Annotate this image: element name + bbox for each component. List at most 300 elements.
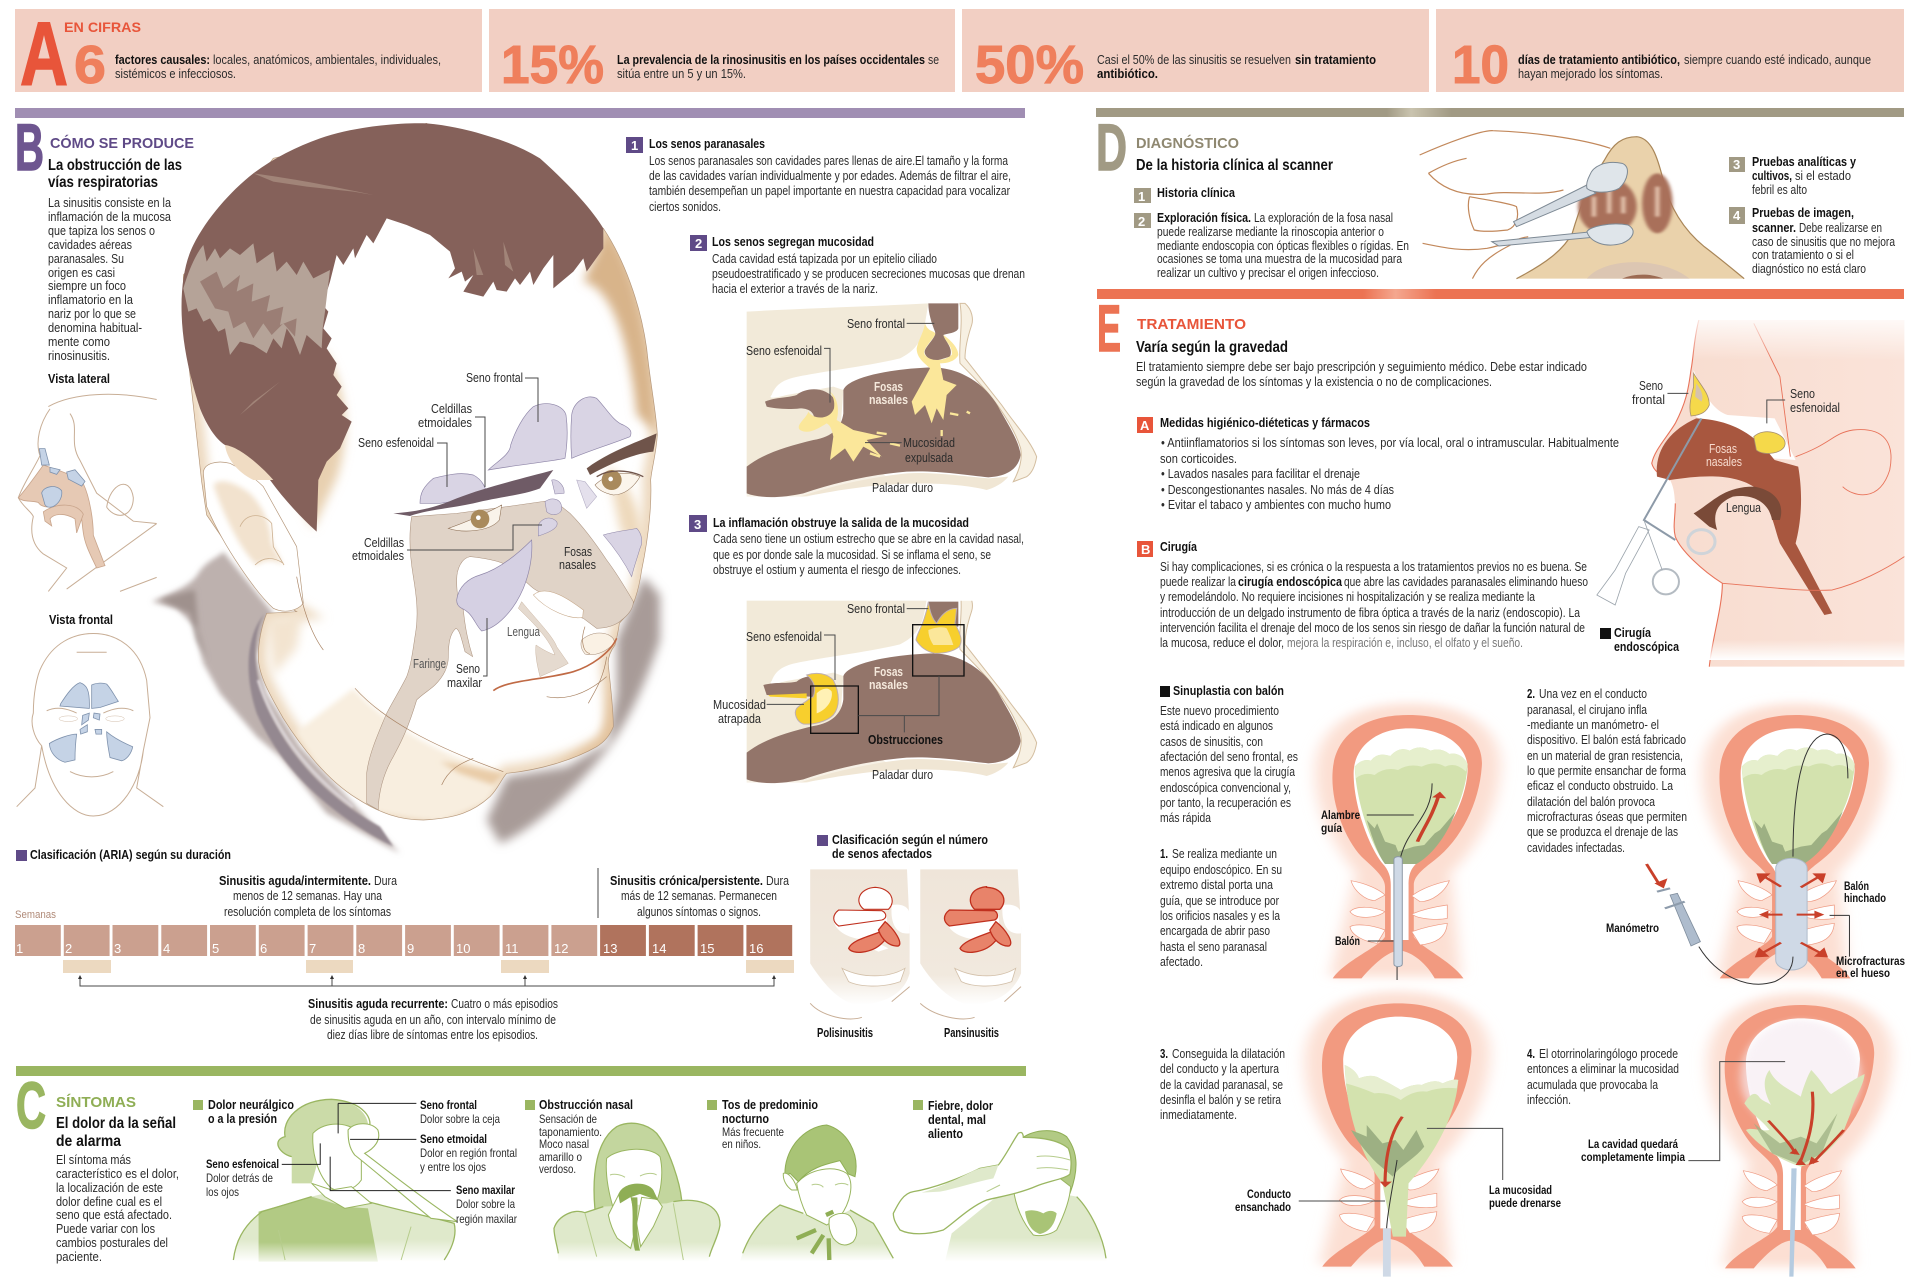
diagram: obstructed ostium: atrapada: [718, 711, 762, 726]
panel B: intro text: [15, 110, 194, 363]
sinuplastia intro text: guía, que se introduce por: [1160, 893, 1280, 908]
week blocks: 12: [554, 941, 568, 956]
classification ARIA timeline: Sinusitis aguda/intermitente.: [219, 873, 371, 888]
week blocks: 5: [212, 941, 219, 956]
panel E: tratamiento: cirugía endoscópica: [1238, 574, 1343, 589]
sinuplasty step 3 illustration: del conducto y la apertura: [1160, 1061, 1280, 1076]
diagram: mucus draining: expulsada: [905, 450, 954, 465]
sinuplasty step 2 illustration: Manómetro: [1606, 921, 1659, 935]
panel C: intro: El dolor da la señal: [56, 1115, 176, 1132]
step 3: la inflamación obstruye: 3: [694, 517, 701, 532]
labels on head: maxilar: [447, 675, 483, 690]
stat: 10 días: siempre cuando esté indicado, aunque: [1684, 52, 1871, 67]
panel D: diagnostico: Debe realizarse en: [1799, 220, 1882, 235]
face lines: jaw, nose, lips: [297, 577, 617, 785]
symptom: dolor neurálgico: los ojos: [206, 1185, 239, 1199]
panel B: intro text: nariz por lo que se: [48, 306, 136, 321]
labels on head: Lengua: [507, 624, 541, 639]
classification ARIA timeline: Dura: [766, 873, 790, 888]
panel C: intro: [16, 1068, 179, 1264]
panel E: tratamiento: que abre las cavidades paranasales eliminando hueso: [1344, 574, 1588, 589]
skin: [183, 123, 657, 822]
stat: 50%: 50%: [975, 35, 1084, 95]
sinuplastia intro text: casos de sinusitis, con: [1160, 734, 1263, 749]
illustration: endoscopic surgery: esfenoidal: [1790, 400, 1840, 415]
sinuplasty step 3 illustration: Conseguida la dilatación: [1172, 1046, 1285, 1061]
week blocks: 6: [260, 941, 267, 956]
classification by number of sinuses: [810, 832, 1021, 1040]
stat: 10 días: hayan mejorado los síntomas.: [1518, 66, 1663, 81]
panel C: intro: C: [16, 1068, 46, 1142]
sinuplasty step 3 illustration: Conducto: [1247, 1187, 1291, 1201]
panel B: intro text: La obstrucción de las: [48, 157, 182, 174]
diagram: obstructed ostium: Obstrucciones: [868, 732, 943, 747]
illustration: endoscopic surgery: Lengua: [1726, 500, 1762, 515]
panel C: intro: Puede variar con los: [56, 1221, 155, 1236]
step 1: los senos paranasales: ciertos sonidos.: [649, 199, 721, 214]
panel D: diagnostico: mediante endoscopia con ópticas flexibles o rígidas. En: [1157, 238, 1409, 253]
panel C: intro: cambios posturales del: [56, 1235, 168, 1250]
symptom: dolor neurálgico: Seno esfenoical: [206, 1157, 279, 1171]
sinuplasty step 3 illustration: desinfla el balón y se retira: [1160, 1092, 1282, 1107]
panel C: intro: paciente.: [56, 1249, 102, 1264]
sinuplasty step 2 text: que se produzca el drenaje de las: [1527, 824, 1678, 839]
classification ARIA timeline: Dura: [374, 873, 398, 888]
sinuplasty step 2 illustration: en el hueso: [1836, 966, 1890, 980]
sinus: sphenoid, ethmoid and eyebrows: [393, 433, 657, 577]
diagram: mucus draining: Paladar duro: [872, 480, 933, 495]
week blocks: 4: [163, 941, 170, 956]
sinuplasty step 2 text: lo que permite ensanchar de forma: [1527, 763, 1687, 778]
classification ARIA timeline: Clasificación (ARIA) según su duración: [30, 847, 231, 862]
labels on head: Celdillas: [431, 401, 472, 416]
illustration: endoscopic surgery: Cirugía: [1614, 625, 1652, 640]
figure: woman with tissue: [554, 1123, 720, 1262]
panel B: intro text: CÓMO SE PRODUCE: [50, 134, 194, 152]
sinuplasty step 4 illustration: La cavidad quedará: [1588, 1137, 1678, 1151]
sinus: maxillary: [457, 540, 532, 631]
symptom: obstrucción nasal: taponamiento.: [539, 1125, 602, 1139]
symptom: dolor neurálgico: Dolor neurálgico: [208, 1097, 294, 1112]
panel D: diagnostico: 3: [1733, 157, 1740, 172]
panel D: diagnostico: De la historia clínica al scanner: [1136, 157, 1333, 174]
labels on head: etmoidales: [352, 548, 404, 563]
panel D: diagnostico: con tratamiento o si el: [1752, 247, 1854, 262]
recurrent episodes markers: [63, 960, 794, 986]
classification ARIA timeline: más de 12 semanas. Permanecen: [621, 888, 777, 903]
stat: 10 días: días de tratamiento antibiótico,: [1518, 52, 1680, 67]
week blocks: 9: [407, 941, 414, 956]
sinuplastia intro text: hasta el seno paranasal: [1160, 939, 1267, 954]
classification ARIA timeline: Sinusitis aguda recurrente:: [308, 996, 448, 1011]
diagram: obstructed ostium: nasales: [869, 677, 908, 692]
diagram: mucus draining: Fosas: [874, 379, 903, 394]
panel E: tratamiento: A: [1140, 418, 1150, 433]
diagram: obstructed ostium: Seno frontal: [847, 601, 905, 616]
diagram: mucus draining: Seno esfenoidal: [746, 343, 822, 358]
panel B: intro text: cavidades aéreas: [48, 237, 132, 252]
step 3: la inflamación obstruye: obstruye el ostium y aumenta el riesgo de infecciones.: [713, 562, 961, 577]
symptom: obstrucción nasal: Obstrucción nasal: [539, 1097, 633, 1112]
sinuplasty step 4 illustration: entonces a eliminar la mucosidad: [1527, 1061, 1679, 1076]
sinuplasty step 1 illustration: Alambre: [1321, 808, 1360, 822]
classification by number of sinuses: Polisinusitis: [817, 1025, 873, 1040]
pharynx and nasal passages: [367, 500, 633, 810]
step 2: los senos segregan mucosidad: [690, 234, 1025, 296]
sinuplasty step 1 illustration: [1315, 703, 1500, 980]
sinuplastia intro text: endoscópica convencional y,: [1160, 780, 1291, 795]
section E header bar: [1097, 289, 1904, 299]
step 3: la inflamación obstruye: La inflamación obstruye la salida de la mucosidad: [713, 515, 969, 530]
panel D: diagnostico: Pruebas de imagen,: [1752, 205, 1854, 220]
sinuplastia intro text: menos agresiva que la cirugía: [1160, 764, 1296, 779]
illustration: head with paranasal sinuses: [152, 123, 660, 853]
symptom: fiebre: Fiebre, dolor: [928, 1098, 993, 1113]
sinuplasty step 2 text: cavidades infectadas.: [1527, 840, 1625, 855]
sinuplasty step 4 illustration: infección.: [1527, 1092, 1571, 1107]
sinuplasty step 2 text: 2.: [1527, 686, 1535, 701]
step 1: los senos paranasales: [626, 136, 1011, 214]
illustration: endoscopic surgery: Seno: [1790, 386, 1815, 401]
panel C: intro: seno que está afectado.: [56, 1207, 172, 1222]
illustration: endoscopic surgery: [1597, 310, 1906, 667]
diagram: obstructed ostium: Fosas: [874, 664, 903, 679]
week blocks: 2: [65, 941, 72, 956]
classification ARIA timeline: de sinusitis aguda en un año, con intervalo mínimo de: [310, 1012, 556, 1027]
sinuplasty step 2 text: dilatación del balón provoca: [1527, 794, 1656, 809]
week blocks: 8: [358, 941, 365, 956]
stat: 6 factores causales: A: [20, 5, 68, 105]
panel E: tratamiento: • Antiinflamatorios si los síntomas son leves, por vía local, oral o intramuscular. Habitualmente: [1161, 435, 1619, 450]
panel B: intro text: vías respiratorias: [48, 174, 158, 191]
panel B: intro text: siempre un foco: [48, 278, 126, 293]
sinuplastia intro text: 1.: [1160, 846, 1168, 861]
sinuplasty step 4 illustration: 4.: [1527, 1046, 1535, 1061]
diagram: mucus draining: Seno frontal: [847, 316, 905, 331]
sinuplastia intro text: encargada de abrir paso: [1160, 923, 1270, 938]
symptom: dolor neurálgico: Dolor en región frontal: [420, 1146, 517, 1160]
panel D: diagnostico: febril es alto: [1752, 182, 1807, 197]
sinuplasty step 3 illustration: de la cavidad paranasal, se: [1160, 1077, 1283, 1092]
lateral view: Vista lateral: [48, 371, 110, 386]
stat: 10 días: [1436, 9, 1904, 95]
labels on head: [352, 370, 596, 690]
classification ARIA timeline: resolución completa de los síntomas: [224, 904, 391, 919]
panel B: intro text: inflamación de la mucosa: [48, 209, 172, 224]
sinuplastia intro text: más rápida: [1160, 810, 1212, 825]
week blocks: 11: [505, 941, 518, 956]
stat: 6 factores causales: sistémicos e infecciosos.: [115, 66, 236, 81]
panel C: intro: característico es el dolor,: [56, 1166, 179, 1181]
panel C: intro: SÍNTOMAS: [56, 1094, 136, 1111]
sinuplasty step 4 illustration: completamente limpia: [1581, 1150, 1685, 1164]
sinuplasty step 4 illustration: El otorrinolaringólogo procede: [1539, 1046, 1678, 1061]
step 1: los senos paranasales: de las cavidades varían individualmente y por edades. Además de filtrar el aire,: [649, 168, 1011, 183]
panel C: intro: de alarma: [56, 1133, 121, 1150]
sinuplastia intro text: equipo endoscópico. En su: [1160, 862, 1282, 877]
panel E: tratamiento: TRATAMIENTO: [1137, 316, 1246, 333]
illustration: endoscopic surgery: Seno: [1639, 378, 1663, 393]
symptom: tos nocturna: Tos de predominio: [722, 1097, 818, 1112]
classification by number of sinuses: de senos afectados: [832, 846, 932, 861]
sinuplasty step 2 text: Una vez en el conducto: [1539, 686, 1647, 701]
panel D: diagnostico: cultivos,: [1752, 168, 1792, 183]
symptom: dolor neurálgico: Seno frontal: [420, 1098, 477, 1112]
step 3: la inflamación obstruye: [689, 515, 1024, 577]
panel D: diagnostico: 4: [1733, 208, 1741, 223]
panel D: diagnostico: D: [1096, 110, 1127, 184]
stat: 10 días: 10: [1452, 35, 1509, 95]
week blocks: 14: [652, 941, 666, 956]
panel E: tratamiento: E: [1097, 291, 1121, 365]
labels on head: Fosas: [564, 544, 592, 559]
figure: man with fever: [893, 1131, 1107, 1262]
step 2: los senos segregan mucosidad: pseudoestratificado y se producen secreciones mucosas que drenan: [712, 266, 1025, 281]
sinuplastia intro text: está indicado en algunos: [1160, 718, 1273, 733]
panel B: intro text: origen es casi: [48, 265, 115, 280]
sinuplastia intro text: extremo distal porta una: [1160, 877, 1274, 892]
figure: boy coughing: [740, 1125, 893, 1262]
symptom: dolor neurálgico: o a la presión: [208, 1111, 277, 1126]
panel E: tratamiento: y remodelándolo. No requiere incisiones ni hospitalización y se realiza mediante la: [1160, 589, 1536, 604]
panel D: diagnostico: puede realizarse mediante la rinoscopia anterior o: [1157, 224, 1384, 239]
labels on head: nasales: [559, 557, 596, 572]
classification ARIA timeline: Sinusitis crónica/persistente.: [610, 873, 763, 888]
labels on head: etmoidales: [418, 415, 472, 430]
panel D: diagnostico: 2: [1138, 214, 1145, 229]
sinuplasty step 2 text: en un material de gran resistencia,: [1527, 748, 1683, 763]
sinuplasty step 2 text: [1527, 686, 1687, 855]
symptom: fiebre: dental, mal: [928, 1112, 986, 1127]
symptom: dolor neurálgico: Seno etmoidal: [420, 1132, 487, 1146]
sinuplasty step 1 illustration: Balón: [1335, 934, 1360, 948]
sinuplasty step 2 text: dispositivo. El balón está fabricado: [1527, 732, 1686, 747]
panel B: intro text: paranasales. Su: [48, 251, 124, 266]
diagram: mucus draining: [746, 303, 1037, 497]
symptom: obstrucción nasal: Moco nasal: [539, 1137, 589, 1151]
sinuplasty step 3 illustration: 3.: [1160, 1046, 1168, 1061]
illustration: endoscopic surgery: endoscópica: [1614, 639, 1680, 654]
sinuplasty step 2 text: -mediante un manómetro- el: [1527, 717, 1659, 732]
panel D: diagnostico: 1: [1138, 189, 1145, 204]
panel D: diagnostico: scanner.: [1752, 220, 1796, 235]
panel D: diagnostico: realizar un cultivo y precisar el origen infeccioso.: [1157, 265, 1379, 280]
week blocks: [15, 925, 792, 956]
sinuplasty step 2 text: eficaz el conducto obstruido. La: [1527, 778, 1674, 793]
sinuplasty step 1 illustration: guía: [1321, 821, 1342, 835]
sinuplasty step 3 illustration: [1160, 992, 1561, 1277]
week blocks: 3: [114, 941, 121, 956]
section C header bar: [16, 1066, 1026, 1076]
panel B: intro text: La sinusitis consiste en la: [48, 195, 172, 210]
figure: man pressing forehead: [233, 1099, 457, 1262]
symptom: tos nocturna: Más frecuente: [722, 1125, 784, 1139]
step 3: la inflamación obstruye: que es por donde sale la mucosidad. Si se inflama el seno, se: [713, 547, 991, 562]
labels on head: Seno esfenoidal: [358, 435, 434, 450]
skull: polisinusitis: [810, 869, 910, 1019]
symptom: obstrucción nasal: amarillo o: [539, 1150, 582, 1164]
sinuplastia intro text: Se realiza mediante un: [1172, 846, 1277, 861]
panel D: diagnostico: Pruebas analíticas y: [1752, 154, 1857, 169]
panel E: tratamiento: Cirugía: [1160, 539, 1198, 554]
stat: 6 factores causales: factores causales:: [115, 52, 210, 67]
sinuplastia intro text: los orificios nasales y es la: [1160, 908, 1281, 923]
symptom: tos nocturna: nocturno: [722, 1111, 769, 1126]
diagram: mucus draining: Mucosidad: [903, 435, 955, 450]
week blocks: 13: [603, 941, 617, 956]
panel D: diagnostico: Historia clínica: [1157, 185, 1236, 200]
stat: 15%: [489, 9, 955, 95]
sinuplasty step 2 illustration: hinchado: [1844, 891, 1886, 905]
symptom: dolor neurálgico: Dolor sobre la: [456, 1197, 515, 1211]
panel E: tratamiento: [1097, 291, 1619, 650]
panel E: tratamiento: • Evitar el tabaco y ambientes con mucho humo: [1161, 497, 1391, 512]
panel E: tratamiento: Medidas higiénico-diéteticas y fármacos: [1160, 415, 1370, 430]
stat: 6 factores causales: EN CIFRAS: [64, 19, 141, 35]
sinuplastia intro text: [1160, 683, 1298, 969]
week blocks: 16: [749, 941, 763, 956]
sinuplasty step 2 illustration: [1606, 703, 1905, 984]
panel E: tratamiento: la mucosa, reduce el dolor,: [1160, 635, 1284, 650]
lateral view: [18, 371, 157, 591]
symptom: dolor neurálgico: [193, 1097, 517, 1262]
symptom: fiebre: aliento: [928, 1126, 963, 1141]
symptom: dolor neurálgico: región maxilar: [456, 1212, 517, 1226]
sinuplasty step 3 illustration: ensanchado: [1235, 1200, 1291, 1214]
classification by number of sinuses: Clasificación según el número: [832, 832, 988, 847]
step 1: los senos paranasales: 1: [631, 138, 638, 153]
panel B: intro text: inflamatorio en la: [48, 292, 134, 307]
illustration: nose examination: [1420, 131, 1744, 279]
section B header bar: [15, 108, 1025, 118]
labels on head: Seno: [456, 661, 480, 676]
symptom: dolor neurálgico: Seno maxilar: [456, 1183, 515, 1197]
skull: pansinusitis: [920, 869, 1021, 1019]
panel E: tratamiento: son corticoides.: [1160, 451, 1237, 466]
week blocks: 1: [16, 941, 23, 956]
step 1: los senos paranasales: Los senos paranasales son cavidades pares llenas de aire.El tamaño y la forma: [649, 153, 1009, 168]
diagram: obstructed ostium: Paladar duro: [872, 767, 933, 782]
week blocks: 15: [700, 941, 714, 956]
sinuplasty step 3 illustration: inmediatamente.: [1160, 1107, 1237, 1122]
step 1: los senos paranasales: Los senos paranasales: [649, 136, 765, 151]
panel E: tratamiento: Varía según la gravedad: [1136, 339, 1288, 356]
labels on head: Seno frontal: [466, 370, 523, 385]
sinuplastia intro text: Sinuplastia con balón: [1173, 683, 1284, 698]
panel D: diagnostico: diagnóstico no está claro: [1752, 261, 1866, 276]
step 3: la inflamación obstruye: Cada seno tiene un ostium estrecho que se abre en la cavidad nasal,: [713, 531, 1024, 546]
illustration: endoscopic surgery: frontal: [1632, 392, 1665, 407]
sinuplasty step 2 text: microfracturas óseas que permiten: [1527, 809, 1687, 824]
panel E: tratamiento: • Lavados nasales para facilitar el drenaje: [1161, 466, 1360, 481]
sinuplasty step 3 illustration: La mucosidad: [1489, 1183, 1552, 1197]
stat: 15%: La prevalencia de la rinosinusitis en los países occidentales: [617, 52, 925, 67]
panel E: tratamiento: Si hay complicaciones, si es crónica o la respuesta a los tratamientos previos no es buena. Se: [1160, 559, 1587, 574]
step 2: los senos segregan mucosidad: Cada cavidad está tapizada por un epitelio ciliado: [712, 251, 937, 266]
classification ARIA timeline: algunos síntomas o signos.: [637, 904, 761, 919]
panel D: diagnostico: DIAGNÓSTICO: [1136, 134, 1239, 152]
panel D: diagnostico: si el estado: [1795, 168, 1851, 183]
sinuplastia intro text: Este nuevo procedimiento: [1160, 703, 1279, 718]
sinuplasty step 2 text: paranasal, el cirujano infla: [1527, 702, 1648, 717]
stat: 6 factores causales: [15, 5, 482, 105]
panel E: tratamiento: puede realizar la: [1160, 574, 1237, 589]
illustration: endoscopic surgery: nasales: [1706, 454, 1742, 469]
symptom: fiebre: [893, 1098, 1107, 1262]
classification ARIA timeline: [15, 847, 794, 1042]
sinuplasty step 2 illustration: Microfracturas: [1836, 954, 1905, 968]
symptom: dolor neurálgico: y entre los ojos: [420, 1160, 486, 1174]
stat: 15%: sitúa entre un 5 y un 15%.: [617, 66, 746, 81]
diagram: obstructed ostium: Mucosidad: [713, 697, 766, 712]
classification ARIA timeline: diez días libre de síntomas entre los episodios.: [327, 1027, 538, 1042]
stat: 6 factores causales: 6: [74, 35, 106, 95]
frontal view: [17, 612, 163, 816]
sinuplastia intro text: afectación del seno frontal, es: [1160, 749, 1298, 764]
panel B: intro text: mente como: [48, 334, 110, 349]
sinuplasty step 2 illustration: Balón: [1844, 879, 1869, 893]
step 2: los senos segregan mucosidad: 2: [695, 236, 702, 251]
panel E: tratamiento: intervención facilita el drenaje del moco de los senos sin riesgo de dañar la función natural de: [1160, 620, 1585, 635]
panel E: tratamiento: según la gravedad de los síntomas y la existencia o no de complicaciones.: [1136, 374, 1492, 389]
diagram: mucus draining: nasales: [869, 392, 908, 407]
stat: 50%: sin tratamiento: [1295, 52, 1376, 67]
stat: 15%: 15%: [501, 35, 604, 95]
week blocks: 10: [456, 941, 470, 956]
panel D: diagnostico: Exploración física.: [1157, 210, 1251, 225]
panel A: en cifras: [15, 5, 1904, 105]
diagram: obstructed ostium: [713, 580, 1037, 783]
symptom: dolor neurálgico: Dolor sobre la ceja: [420, 1112, 500, 1126]
symptom: obstrucción nasal: Sensación de: [539, 1112, 597, 1126]
panel E: tratamiento: introducción de un delgado instrumento de fibra óptica a través de la nariz (endoscopio). La: [1160, 605, 1581, 620]
frontal view: Vista frontal: [49, 612, 113, 627]
week blocks: 7: [309, 941, 316, 956]
panel E: tratamiento: B: [1141, 542, 1150, 557]
panel E: tratamiento: • Descongestionantes nasales. No más de 4 días: [1161, 482, 1394, 497]
panel D: diagnostico: [1096, 110, 1896, 280]
sinuplastia intro text: afectado.: [1160, 954, 1203, 969]
symptom: tos nocturna: en niños.: [722, 1137, 761, 1151]
step 2: los senos segregan mucosidad: Los senos segregan mucosidad: [712, 234, 874, 249]
panel E: tratamiento: mejora la respiración e, incluso, el olfato y el sueño.: [1287, 635, 1523, 650]
stat: 50%: antibiótico.: [1097, 66, 1158, 81]
panel C: intro: la localización de este: [56, 1180, 163, 1195]
diagram: obstructed ostium: Seno esfenoidal: [746, 629, 822, 644]
stat: 50%: [962, 9, 1429, 95]
panel D: diagnostico: La exploración de la fosa nasal: [1254, 210, 1393, 225]
section D header bar: [1096, 108, 1904, 117]
sinus: frontal: [488, 397, 631, 470]
stat: 6 factores causales: locales, anatómicos, ambientales, individuales,: [213, 52, 441, 67]
stat: 50%: Casi el 50% de las sinusitis se resuelven: [1097, 52, 1291, 67]
symptom: dolor neurálgico: Dolor detrás de: [206, 1171, 273, 1185]
labels on head: Faringe: [413, 656, 446, 671]
symptom: obstrucción nasal: verdoso.: [539, 1162, 576, 1176]
panel B: intro text: B: [15, 110, 44, 184]
panel C: intro: dolor define cual es el: [56, 1194, 162, 1209]
sinuplasty step 3 illustration: puede drenarse: [1489, 1196, 1561, 1210]
classification ARIA timeline: Semanas: [15, 909, 56, 921]
symptom: obstrucción nasal: [525, 1097, 720, 1262]
panel B: intro text: rinosinusitis.: [48, 348, 110, 363]
symptom: tos nocturna: [707, 1097, 893, 1262]
panel E: tratamiento: El tratamiento siempre debe ser bajo prescripción y seguimiento médico. Debe estar indicado: [1136, 359, 1587, 374]
panel D: diagnostico: ocasiones se toma una muestra de la mucosidad para: [1157, 251, 1403, 266]
classification ARIA timeline: Cuatro o más episodios: [451, 996, 558, 1011]
eyes: [448, 470, 643, 531]
hair: [182, 123, 603, 532]
